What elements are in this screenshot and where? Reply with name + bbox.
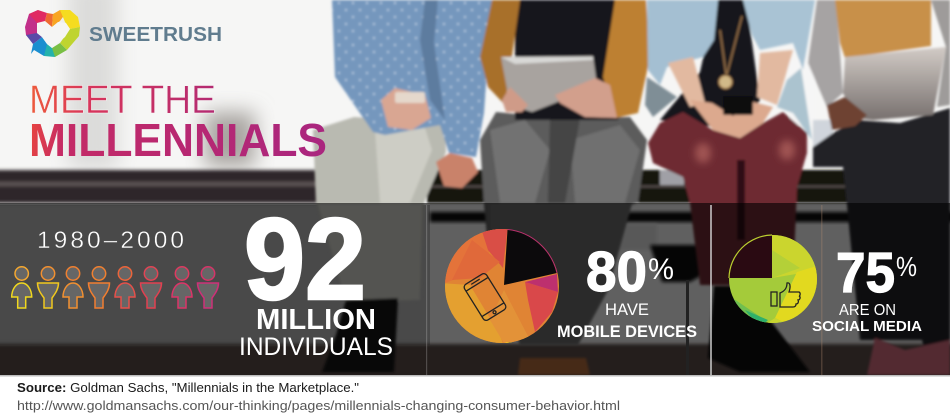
left bench — [0, 170, 320, 203]
vertical window frames — [426, 205, 822, 375]
pie chart: 75% social media — [728, 234, 817, 323]
person icon 2 — [38, 267, 58, 308]
big number: 92 — [244, 194, 366, 324]
person 2: black top — [515, 0, 618, 120]
person icon 6 — [140, 267, 162, 308]
wordmark: SWEETRUSH — [89, 24, 222, 46]
person 4: laptop — [843, 47, 946, 120]
80: 80 — [586, 240, 647, 304]
person 1: denim shirt — [332, 0, 492, 157]
person 3: white gap — [787, 114, 800, 128]
dark missing slice — [729, 235, 772, 278]
person icon 5 — [115, 267, 135, 308]
person 4: hand — [827, 97, 867, 130]
person 2: tablet — [501, 56, 597, 112]
stat: 92 million individuals — [239, 194, 393, 361]
person 3: necklace — [719, 16, 742, 88]
social media: SOCIAL MEDIA — [812, 318, 922, 335]
person 4: sneakers — [867, 338, 950, 375]
pie chart: 80% mobile devices — [445, 229, 559, 343]
icon: smartphone — [463, 272, 507, 322]
logo: SweetRush — [25, 10, 222, 57]
icon: thumbs up — [771, 283, 800, 307]
person icon 1 — [12, 267, 32, 308]
person 3: black top — [660, 0, 760, 130]
pie slices — [445, 229, 559, 343]
stat: 80 percent — [557, 240, 697, 341]
have: HAVE — [605, 300, 649, 319]
source citation — [17, 380, 620, 413]
heart cut-out — [37, 22, 70, 48]
url line: http://www.goldmansachs.com/our-thinking/pages/millennials-changing-consumer-behavior.html — [17, 398, 620, 413]
75: 75 — [836, 241, 895, 305]
title — [29, 78, 327, 166]
title line 2: MILLENNIALS — [29, 114, 327, 166]
person 4: light gap — [813, 120, 833, 147]
people — [313, 0, 950, 375]
source line: Source: Goldman Sachs, "Millennials in the Marketplace." — [17, 380, 359, 395]
mobile devices: MOBILE DEVICES — [557, 322, 697, 341]
percent sign: % — [648, 253, 674, 286]
person 2: hands — [502, 87, 528, 112]
person 3: denim shirt — [647, 0, 718, 85]
person 4: cardigan and top — [808, 0, 843, 107]
person 2: grey trousers — [478, 110, 649, 232]
bench — [427, 170, 860, 203]
person 2: mustard cardigan — [480, 0, 520, 105]
person icon 3 — [63, 267, 83, 308]
person 3: maroon tights — [648, 112, 807, 285]
bottom dark overlay band — [0, 203, 950, 375]
dark missing slice — [504, 230, 557, 285]
person 1: hands and phone — [381, 88, 431, 130]
title line 1: MEET THE — [29, 78, 216, 122]
person 3: arms and hands — [668, 57, 705, 107]
icon row: eight people — [12, 267, 219, 308]
person icon 7 — [172, 267, 192, 308]
person icon 4 — [88, 267, 110, 308]
percent sign: % — [896, 251, 917, 282]
are on: ARE ON — [839, 302, 896, 319]
birth-year range: 1980–2000 — [37, 227, 184, 254]
person icon 8 — [198, 267, 218, 308]
stat: 75 percent — [812, 241, 922, 335]
individuals: INDIVIDUALS — [239, 333, 393, 361]
maroon knee highlights — [695, 140, 795, 163]
footer rule — [0, 375, 950, 376]
pie slices — [729, 235, 817, 323]
million: MILLION — [256, 304, 376, 336]
person 1: light trousers — [313, 117, 446, 302]
person 3: phone — [723, 96, 753, 115]
person 4: black trousers — [813, 108, 950, 375]
person 3: boots — [708, 286, 810, 372]
icon: polygon heart speech bubble — [25, 10, 80, 57]
